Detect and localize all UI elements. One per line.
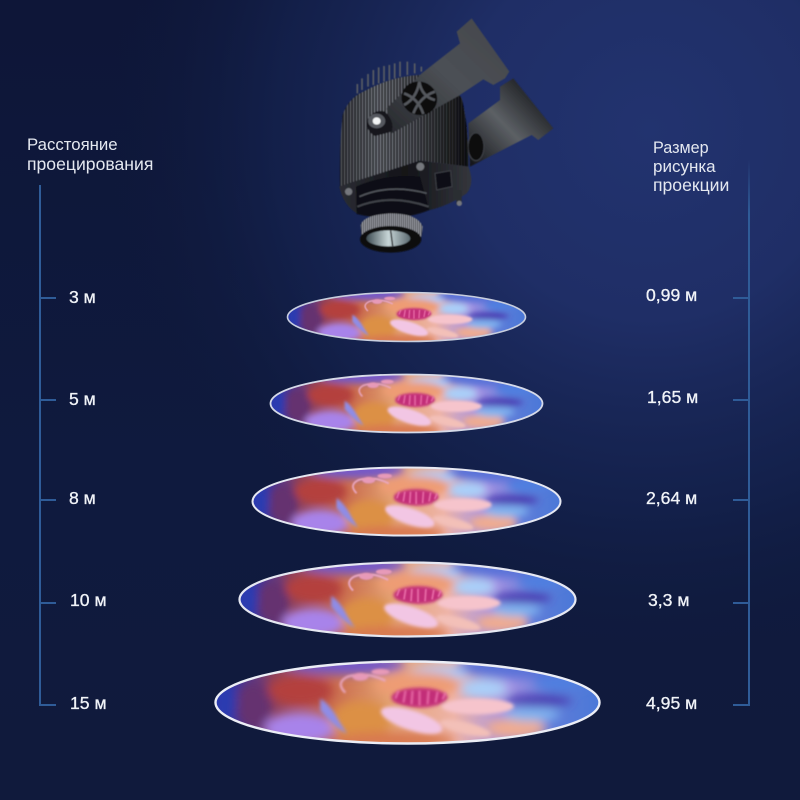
distance label: 15 m: 15 м — [70, 693, 107, 713]
projection ellipse: 15 m — [213, 655, 600, 748]
lens — [360, 226, 421, 253]
heat sink fins — [357, 62, 421, 93]
ribbed body — [340, 75, 468, 187]
heading: image size: Размер — [653, 139, 709, 157]
projection ellipse: 5 m — [269, 370, 543, 436]
lower bracket plate — [468, 78, 553, 167]
left axis: projection distance — [40, 185, 56, 705]
projection ellipse: 10 m — [237, 557, 576, 641]
distance label: 3 m: 3 м — [69, 287, 96, 307]
size label: 2.64 m: 2,64 м — [646, 488, 697, 508]
projector device — [339, 18, 553, 253]
right axis: image size — [733, 160, 750, 706]
heading: projection distance: Расстояние — [27, 135, 118, 154]
heading: image size: проекции — [653, 175, 729, 195]
rear fan detail — [468, 133, 484, 161]
distance label: 5 m: 5 м — [69, 389, 96, 409]
side knob — [435, 171, 452, 190]
bracket vent — [397, 77, 442, 120]
distance label: 8 m: 8 м — [69, 488, 96, 508]
upper bracket plate — [387, 18, 509, 133]
body shading — [340, 75, 468, 187]
bracket knob with highlight — [367, 111, 392, 136]
heading: image size: рисунка — [653, 157, 716, 176]
focus ring — [361, 213, 423, 240]
screws — [345, 163, 462, 206]
lens barrel — [356, 176, 429, 218]
heading: projection distance: проецирования — [27, 154, 153, 174]
body bottom plate — [339, 161, 471, 213]
size label: 1.65 m: 1,65 м — [647, 387, 698, 407]
size label: 4.95 m: 4,95 м — [646, 693, 697, 713]
distance label: 10 m: 10 м — [70, 590, 107, 610]
projection ellipse: 8 m — [250, 462, 561, 539]
size label: 3.3 m: 3,3 м — [648, 590, 689, 610]
projection ellipse: 3 m — [286, 288, 526, 344]
size label: 0.99 m: 0,99 м — [646, 285, 697, 305]
